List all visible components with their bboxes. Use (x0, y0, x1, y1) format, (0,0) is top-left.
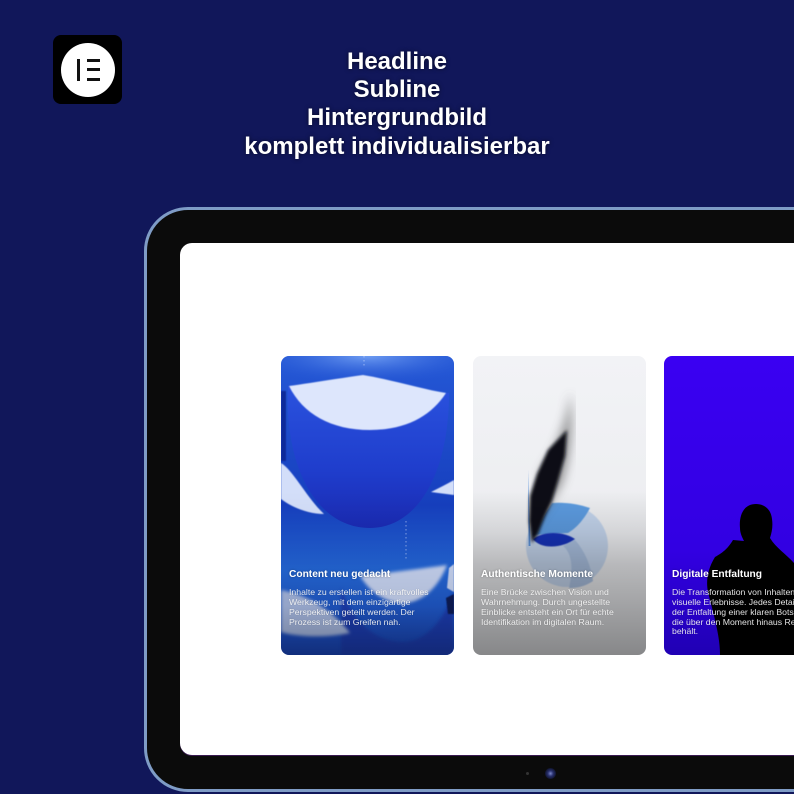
logo mark bar (77, 58, 80, 81)
card description: Inhalte zu erstellen ist ein kraftvolles (289, 587, 429, 597)
large cup (288, 386, 449, 528)
logo mark line 1 (87, 58, 100, 62)
card description: behält. (672, 626, 698, 636)
card title: Authentische Momente (481, 568, 593, 580)
headline text: Hintergrundbild (307, 104, 487, 131)
logo: Elementor (53, 35, 122, 104)
headline text (244, 48, 550, 160)
lower white shapes (360, 565, 447, 603)
tablet screen (180, 243, 794, 755)
side white shapes (281, 463, 324, 514)
headline text: Headline (347, 48, 447, 75)
tablet device frame (144, 207, 794, 792)
disc (526, 505, 608, 587)
card: Content neu gedacht (281, 356, 454, 655)
lower cup (341, 588, 453, 655)
logo mark line 3 (87, 78, 100, 81)
card image: silhouette on violet-blue (664, 356, 794, 655)
headline text: komplett individualisierbar (244, 133, 550, 160)
card description: Einblicke entsteht ein Ort für echte (481, 607, 614, 617)
left edge shadow (281, 391, 286, 461)
card description: Perspektiven geteilt werden. Der (289, 607, 415, 617)
card description (289, 587, 429, 627)
card description: Eine Brücke zwischen Vision und (481, 587, 609, 597)
card image: blurred dark streak and blue disc (473, 356, 646, 655)
blurred streak (535, 392, 572, 526)
card description: Wahrnehmung. Durch ungestellte (481, 597, 610, 607)
logo circle (61, 43, 115, 97)
headline text: Subline (354, 76, 440, 103)
card description: Werkzeug, mit dem einzigartige (289, 597, 411, 607)
card title: Content neu gedacht (289, 568, 390, 580)
card image: blue paper shapes (281, 356, 454, 655)
tablet sensor dot (526, 772, 529, 775)
card description (672, 587, 794, 636)
card description: Identifikation im digitalen Raum. (481, 617, 604, 627)
card description (481, 587, 614, 627)
card gradient overlay (281, 491, 454, 655)
logo mark line 2 (87, 68, 100, 71)
card title: Digitale Entfaltung (672, 568, 762, 580)
card description: Prozess ist zum Greifen nah. (289, 617, 401, 627)
tablet camera (545, 768, 556, 779)
card gradient overlay (473, 491, 646, 655)
card: Digitale Entfaltung (664, 356, 794, 655)
card: Authentische Momente (473, 356, 646, 655)
